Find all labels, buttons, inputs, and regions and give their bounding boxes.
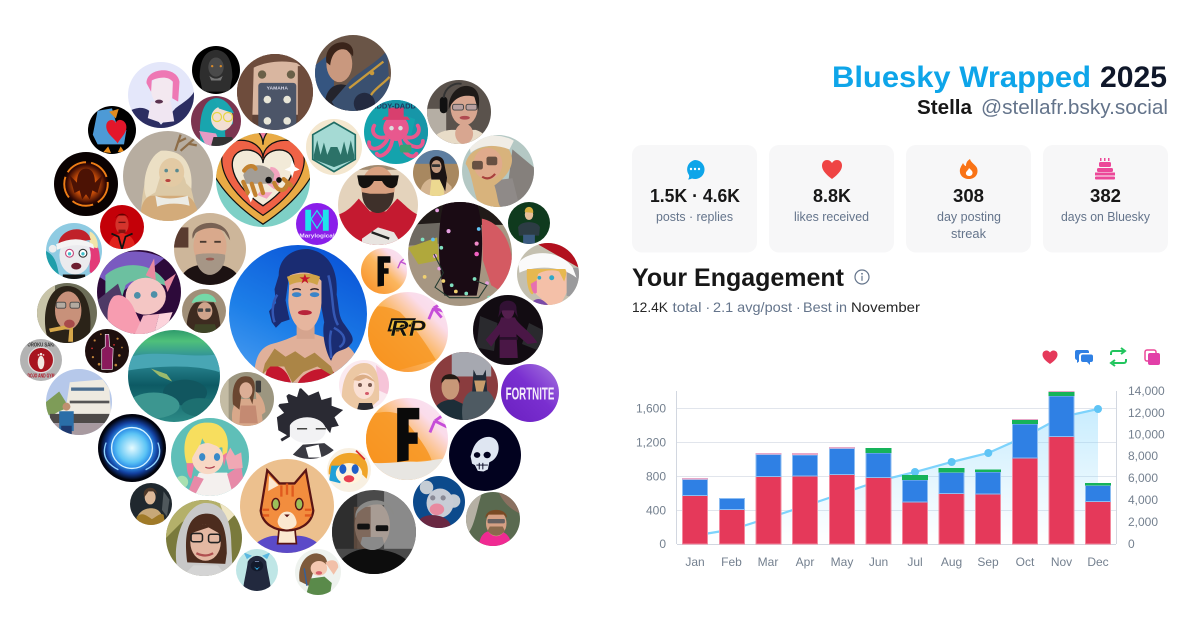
right axis labels: 4,000 bbox=[1128, 493, 1158, 507]
right axis labels: 8,000 bbox=[1128, 449, 1158, 463]
legend icons bbox=[1042, 348, 1160, 366]
title: Bluesky Wrapped bbox=[832, 61, 1091, 94]
right axis labels bbox=[1128, 384, 1165, 551]
left axis labels: 1,200 bbox=[636, 436, 666, 450]
avatar: woman in floral dress bbox=[130, 483, 172, 525]
avatar: pink hair person bbox=[128, 62, 194, 128]
line markers bbox=[691, 405, 1102, 540]
month labels: May bbox=[831, 555, 853, 569]
avatar: girl with Yamaha guitar headstock bbox=[237, 54, 313, 132]
icon: replies legend bbox=[1075, 350, 1093, 365]
icon: info bbox=[855, 270, 869, 284]
avatar: statue fireworks bbox=[85, 329, 129, 373]
month labels: Jul bbox=[907, 555, 923, 569]
avatar: manga blonde bbox=[339, 360, 389, 410]
stacked bars bbox=[682, 391, 1111, 544]
avatar: blue duck with heart bbox=[88, 106, 136, 154]
avatar: Fortnite purple logo bbox=[501, 364, 559, 422]
icon: cake bbox=[1095, 158, 1115, 180]
avatar: orange mascot bbox=[327, 448, 371, 492]
month labels: Sep bbox=[977, 555, 999, 569]
stat card: days on Bluesky bbox=[1043, 145, 1168, 252]
avatar: woman with hood and glasses bbox=[166, 500, 242, 576]
avatar: blue energy orb bbox=[98, 414, 166, 482]
avatar: cat with Christmas lights bbox=[408, 202, 512, 306]
avatar: dark hair woman bbox=[413, 150, 459, 196]
right axis labels: 6,000 bbox=[1128, 471, 1158, 485]
left axis labels: 1,600 bbox=[636, 402, 666, 416]
avatar: big Fortnite F with snow bbox=[366, 398, 448, 480]
stat card: day posting streak: streak bbox=[951, 226, 986, 241]
avatar: black and white man bbox=[332, 490, 416, 574]
avatar: dark purple figure bbox=[473, 295, 543, 365]
icon: chat bubble bbox=[687, 160, 705, 180]
avatar: RP logo on sunset bbox=[368, 292, 448, 372]
engagement summary: · bbox=[706, 299, 710, 315]
avatar: pink octopus bbox=[364, 100, 428, 164]
stat card: day posting streak bbox=[906, 145, 1031, 252]
avatar: hooded blue fox bbox=[236, 549, 278, 591]
month labels: Jun bbox=[869, 555, 888, 569]
stat card: day posting streak: day posting bbox=[937, 209, 1001, 224]
user name and handle: Stella bbox=[917, 97, 973, 119]
right axis labels: 0 bbox=[1128, 537, 1135, 551]
avatar: man in front of building bbox=[46, 369, 112, 435]
avatar: reindeer drawing bbox=[123, 131, 213, 221]
avatar: man with Batman statue bbox=[430, 352, 498, 420]
avatar: RP logo on sunset: RP bbox=[390, 316, 426, 341]
avatar: teal hair glasses bbox=[191, 96, 241, 146]
stat card: day posting streak: 308 bbox=[953, 186, 984, 206]
icon: heart bbox=[822, 160, 842, 179]
avatar: Oroku Saki dojo badge: OROKU SAKI bbox=[28, 343, 55, 349]
avatar: Harley Santa bbox=[46, 223, 102, 279]
avatar: pink octopus: ADDY-DADDY bbox=[371, 103, 421, 110]
engagement summary: November bbox=[851, 299, 920, 315]
stat card: likes received: likes received bbox=[794, 209, 869, 224]
avatar: drawn brown hair girl bbox=[295, 549, 341, 595]
avatar: mirror selfie bbox=[220, 372, 274, 426]
stat card: posts and replies: posts · replies bbox=[656, 209, 733, 224]
engagement summary: 2.1 avg/post bbox=[713, 299, 792, 315]
avatar: soldier character bbox=[508, 202, 550, 244]
avatar: Oroku Saki dojo badge: DOJO AND GYM bbox=[28, 374, 54, 380]
avatar: green underwater photo bbox=[128, 330, 220, 422]
avatar: bearded man pink shirt bbox=[466, 492, 520, 546]
icon: reposts legend bbox=[1111, 348, 1126, 366]
avatar: skull bbox=[449, 419, 521, 491]
avatar: pink and yellow hair anime bbox=[171, 418, 249, 496]
icon: flame bbox=[960, 159, 978, 179]
right axis labels: 10,000 bbox=[1128, 428, 1165, 442]
month labels bbox=[685, 555, 1109, 569]
heading: Your Engagement: Your Engagement bbox=[632, 264, 845, 292]
title: 2025 bbox=[1100, 61, 1167, 94]
avatar: Wonder Woman bbox=[229, 245, 367, 383]
stat card: days on Bluesky: days on Bluesky bbox=[1061, 209, 1150, 224]
engagement summary: 12.4K bbox=[632, 299, 669, 315]
avatar: green cap woman bbox=[182, 289, 226, 333]
icon: quotes legend bbox=[1145, 350, 1160, 365]
month labels: Oct bbox=[1016, 555, 1035, 569]
cumulative line bbox=[695, 409, 1098, 536]
avatar: bear mascot bbox=[413, 476, 465, 528]
month labels: Nov bbox=[1051, 555, 1072, 569]
avatar: carved pumpkin ghost bbox=[54, 152, 118, 216]
user name and handle: @stellafr.bsky.social bbox=[981, 97, 1168, 119]
avatar: Fortnite purple logo: FORTNITE bbox=[506, 383, 554, 403]
combo chart: monthly engagement bbox=[636, 384, 1165, 569]
avatar: orange cat bbox=[240, 459, 334, 553]
avatar: man with dragon sculpture bbox=[315, 35, 391, 114]
avatar: heart with grey creature bbox=[216, 133, 310, 227]
avatar: noodles glasses woman bbox=[37, 283, 97, 343]
avatar: girl with Yamaha guitar headstock: YAMAHA bbox=[267, 86, 288, 92]
avatar: sunglasses man in red hoodie bbox=[338, 165, 418, 245]
month labels: Apr bbox=[796, 555, 814, 569]
avatar: red lit man bbox=[100, 205, 144, 249]
avatar: Santa blonde anime bbox=[517, 243, 579, 305]
cumulative area bbox=[695, 409, 1098, 544]
avatar: black hood bbox=[192, 46, 240, 94]
avatar: anime green hair horned bbox=[97, 250, 181, 334]
avatar: grey beard man bbox=[174, 213, 246, 285]
avatar: headphones woman bbox=[427, 80, 491, 144]
left axis labels bbox=[636, 402, 666, 551]
month labels: Aug bbox=[941, 555, 962, 569]
month labels: Dec bbox=[1087, 555, 1109, 569]
stat card: likes received: 8.8K bbox=[813, 186, 851, 206]
avatar: Oroku Saki dojo badge bbox=[20, 339, 62, 381]
right axis labels: 14,000 bbox=[1128, 384, 1165, 398]
engagement summary: Best in bbox=[803, 299, 847, 315]
avatar: Marylogical logo bbox=[296, 203, 338, 245]
stat card: posts and replies bbox=[632, 145, 757, 252]
left axis labels: 0 bbox=[659, 537, 666, 551]
avatar: black hair cartoon boy bbox=[274, 387, 346, 459]
engagement summary bbox=[632, 299, 920, 315]
engagement summary: · bbox=[796, 299, 801, 315]
month labels: Mar bbox=[758, 555, 778, 569]
stat card: posts and replies: 1.5K · 4.6K bbox=[650, 186, 740, 206]
month labels: Feb bbox=[721, 555, 742, 569]
avatar: blonde selfie bbox=[462, 135, 534, 207]
avatar: small Fortnite F bbox=[361, 248, 407, 294]
right axis labels: 12,000 bbox=[1128, 406, 1165, 420]
avatar: Verdant Wander badge bbox=[306, 119, 362, 175]
icon: likes legend bbox=[1042, 350, 1058, 364]
engagement summary: total bbox=[672, 299, 702, 315]
avatar: Marylogical logo: Marylogical bbox=[299, 233, 335, 239]
stat card: days on Bluesky: 382 bbox=[1090, 186, 1121, 206]
avatar cluster bbox=[20, 35, 579, 595]
right axis labels: 2,000 bbox=[1128, 515, 1158, 529]
left axis labels: 400 bbox=[646, 504, 666, 518]
month labels: Jan bbox=[685, 555, 705, 569]
stat card: likes received bbox=[769, 145, 894, 252]
left axis labels: 800 bbox=[646, 470, 666, 484]
